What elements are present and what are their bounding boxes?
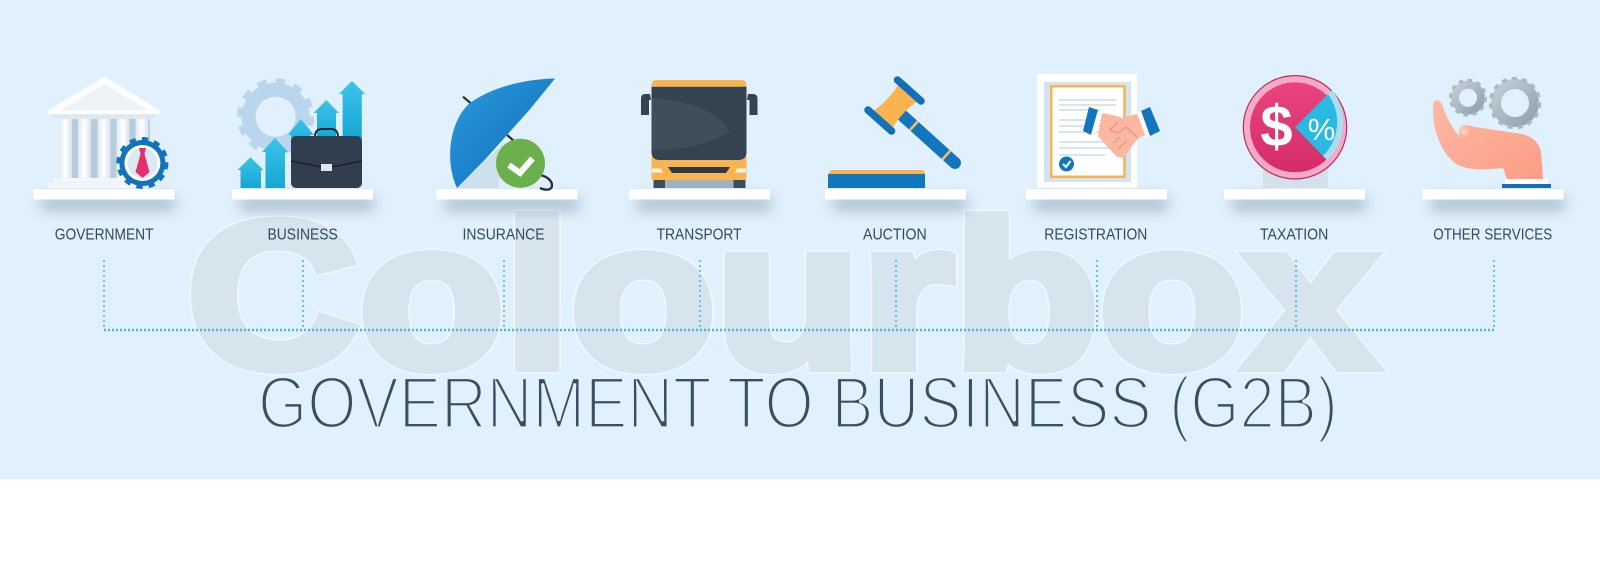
label: other services: OTHER SERVICES [1433, 226, 1552, 244]
headlights [652, 168, 746, 172]
percent sector [1295, 92, 1340, 158]
stand [1263, 168, 1328, 188]
label: registration: REGISTRATION [1044, 226, 1147, 244]
small gear [1450, 80, 1486, 115]
icon: other services hand and gears [1433, 78, 1551, 188]
label: insurance: INSURANCE [462, 226, 544, 244]
pediment [48, 76, 160, 114]
icon: transport bus [641, 80, 758, 188]
text lines [1059, 100, 1116, 155]
label: auction: AUCTION [863, 226, 927, 244]
sound block [828, 170, 925, 188]
grille [668, 167, 730, 173]
columns [59, 119, 148, 178]
cuff [1502, 179, 1551, 188]
title: GOVERNMENT TO BUSINESS (G2B) [258, 363, 1338, 444]
label: transport: TRANSPORT [657, 226, 742, 244]
seal check [1059, 156, 1074, 172]
mirrors [641, 94, 758, 115]
hand [1433, 100, 1543, 179]
gavel head [872, 84, 918, 127]
handle [903, 116, 955, 163]
icon: insurance umbrella with check [450, 78, 555, 190]
percent: % [1308, 112, 1335, 147]
wheels [654, 180, 746, 188]
check badge [496, 139, 545, 188]
steps [48, 178, 135, 188]
entablature [52, 114, 155, 119]
watermark: Colourbox [187, 180, 1377, 412]
windscreen [652, 87, 746, 160]
icon: auction gavel [828, 80, 955, 188]
category labels [55, 226, 1552, 244]
icon: registration certificate and handshake [1037, 74, 1160, 188]
icon: business briefcase, gear and arrows [238, 81, 365, 188]
large gear [1490, 78, 1540, 128]
dotted connector [104, 260, 1494, 330]
icon: taxation sign [1243, 76, 1347, 188]
label: business: BUSINESS [268, 226, 338, 244]
icon: government building with gear [48, 76, 166, 188]
watermark: Colourbox [187, 180, 1377, 412]
label: government: GOVERNMENT [55, 226, 154, 244]
briefcase [291, 129, 362, 188]
shelves [34, 189, 1565, 211]
handshake [1083, 107, 1160, 158]
label: taxation: TAXATION [1260, 226, 1328, 244]
growth arrows [238, 81, 365, 188]
dollar: $ [1260, 94, 1293, 159]
gear with tie [118, 139, 166, 187]
gear [240, 81, 312, 153]
